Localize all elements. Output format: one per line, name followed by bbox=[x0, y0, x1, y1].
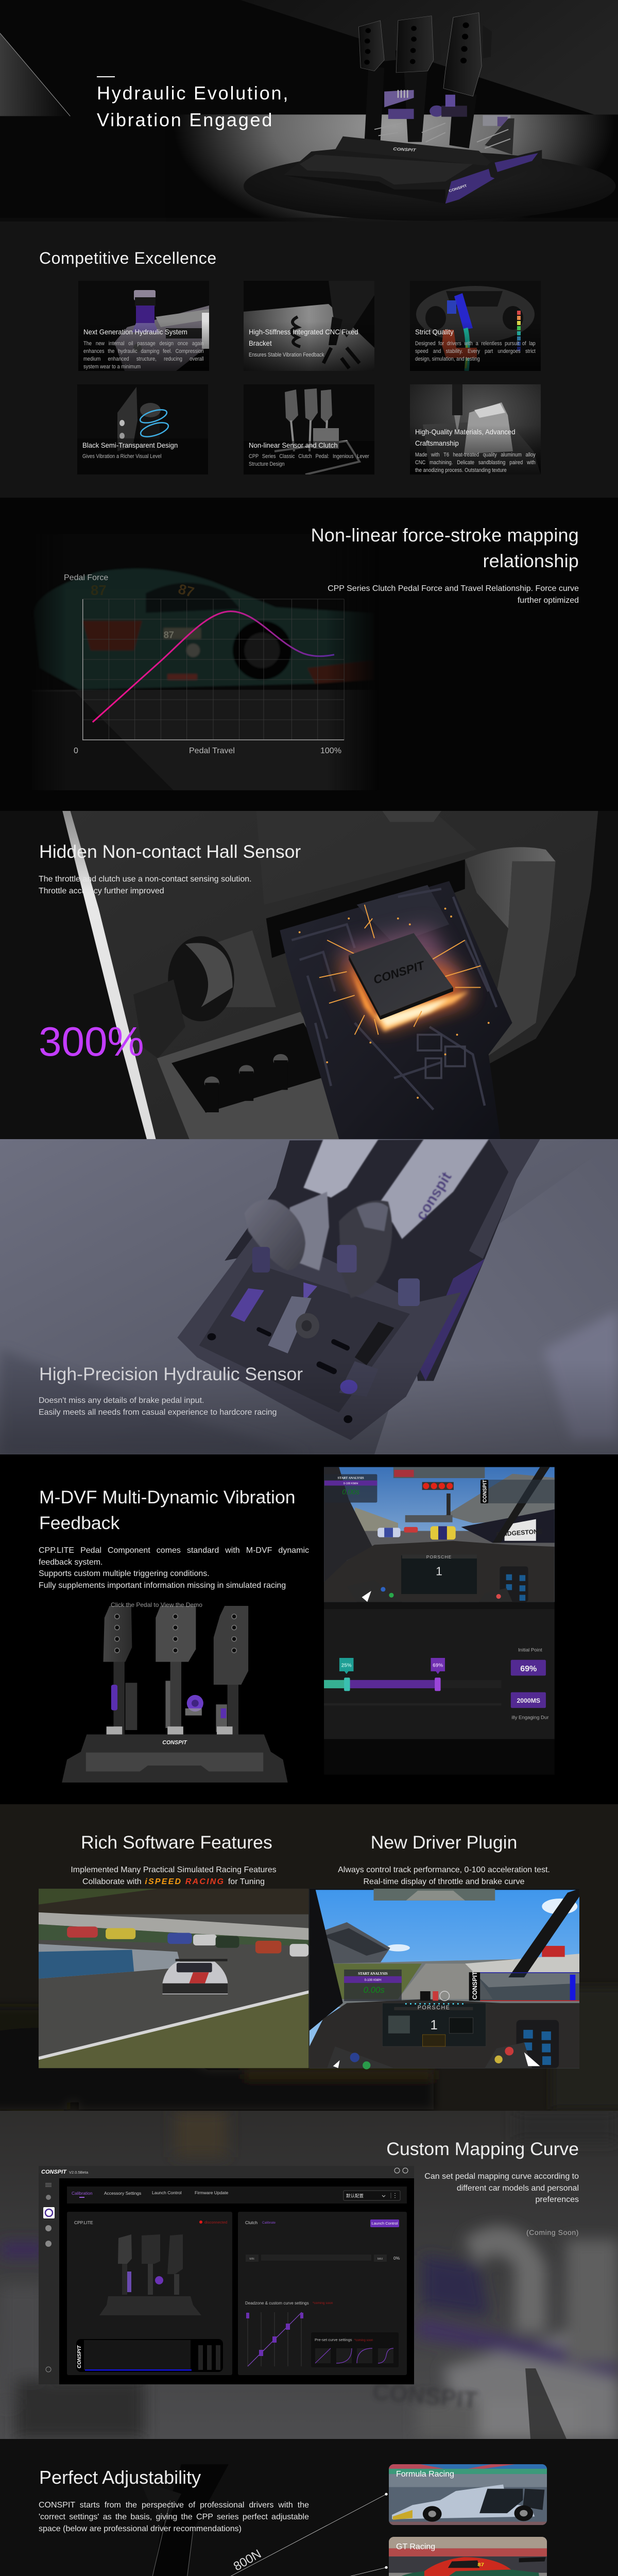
card text bbox=[415, 341, 536, 362]
axis label: zero: 0 bbox=[74, 747, 78, 755]
pedal plates bbox=[358, 13, 482, 96]
chip bbox=[349, 933, 453, 1020]
tab bar: Launch Control bbox=[152, 2190, 182, 2195]
coming soon note: (Coming Soon) bbox=[526, 2228, 579, 2236]
card title bbox=[249, 328, 358, 347]
heading: new driver plugin: New Driver Plugin bbox=[371, 1832, 517, 1853]
cockpit screenshot: 0-100 KM/H bbox=[365, 1978, 381, 1982]
photo: driver feet on pedals bbox=[0, 1139, 618, 1454]
track screenshot bbox=[39, 1889, 308, 2068]
pedal set: CONSPIT bbox=[162, 1740, 187, 1746]
simulator screen: START ANALYSIS bbox=[338, 1477, 364, 1480]
card: formula racing bbox=[389, 2464, 547, 2525]
curve settings panel: *coming soon bbox=[313, 2301, 333, 2305]
cockpit screenshot: 1 bbox=[430, 2017, 438, 2032]
card text bbox=[249, 453, 369, 467]
simulator screen: 0.00s bbox=[342, 1488, 359, 1496]
panel: software and driver plugin bbox=[0, 1804, 618, 2111]
text: Throttle accuracy further improved bbox=[39, 886, 164, 895]
card title bbox=[415, 428, 516, 447]
curve settings panel: Calibrate bbox=[262, 2221, 276, 2225]
card text: Ensures Stable Vibration Feedback bbox=[249, 352, 324, 358]
hydraulic cylinders bbox=[231, 1245, 420, 1397]
panel: custom mapping curve bbox=[0, 2111, 618, 2439]
heading: relationship bbox=[483, 550, 579, 571]
force curve bbox=[93, 612, 334, 722]
card title: Next Generation Hydraulic System bbox=[83, 328, 187, 336]
tab bar: Calibration bbox=[72, 2191, 93, 2196]
force lines bbox=[174, 2494, 386, 2576]
vibration settings panel: Initial Point bbox=[518, 1648, 542, 1653]
illustration: pedals and simulator demo bbox=[62, 1467, 555, 1783]
screenshots: race track and cockpit bbox=[0, 1889, 618, 2111]
simulator screen: 0-100 KM/H bbox=[344, 1482, 358, 1485]
heading: Perfect Adjustability bbox=[39, 2467, 201, 2488]
text: The throttle and clutch use a non-contact sensing solution. bbox=[39, 875, 252, 884]
vibration settings panel: 25% bbox=[341, 1663, 352, 1669]
text: different car models and personal bbox=[457, 2183, 579, 2193]
simulator screen: BRIDGESTONE bbox=[496, 1528, 543, 1538]
curve settings panel: MIN bbox=[249, 2258, 254, 2261]
panel: M-DVF vibration feedback bbox=[0, 1454, 618, 1804]
text: Easily meets all needs from casual experience to hardcore racing bbox=[39, 1408, 277, 1417]
text bbox=[328, 584, 579, 605]
card: non-linear sensor and clutch bbox=[244, 384, 374, 474]
heading: rich software features: Rich Software Features bbox=[81, 1832, 272, 1853]
curve settings panel: Deadzone & custom curve settings bbox=[245, 2301, 309, 2306]
curve settings panel: Pre-set curve settings bbox=[315, 2337, 352, 2342]
cockpit screenshot: START ANALYSIS bbox=[358, 1972, 388, 1976]
stat: 300%: 300% bbox=[39, 1019, 144, 1064]
heading: High-Precision Hydraulic Sensor bbox=[39, 1364, 303, 1384]
heading: Non-linear force-stroke mapping bbox=[311, 524, 579, 546]
text: driver plugin: Real-time display of throttle and brake curve bbox=[363, 1877, 525, 1886]
text bbox=[39, 1546, 309, 1590]
card text: CNC machining. Delicate sandblasting paired with bbox=[415, 460, 536, 466]
force-travel grid bbox=[83, 599, 344, 740]
rear pedal mechanisms bbox=[365, 25, 514, 155]
simulator screen: 1 bbox=[436, 1564, 442, 1578]
card: GT racing bbox=[389, 2537, 547, 2576]
text bbox=[424, 2172, 579, 2204]
axis label: 100%: 100% bbox=[320, 747, 341, 755]
tab bar: Accessory Settings bbox=[104, 2191, 141, 2196]
title bar: CONSPIT bbox=[41, 2169, 67, 2175]
text: software features bbox=[71, 1866, 277, 1886]
simulator screen bbox=[324, 1467, 555, 1602]
end points bbox=[166, 2493, 388, 2576]
sidebar icons bbox=[43, 2183, 55, 2372]
pedal calibration panel: disconnected bbox=[204, 2220, 227, 2225]
background: race car photo bbox=[36, 568, 369, 790]
pedal base: CONSPIT bbox=[448, 183, 468, 193]
chip glow bbox=[299, 905, 490, 1099]
card text: Structure Design bbox=[249, 461, 285, 467]
card title: Black Semi-Transparent Design bbox=[82, 441, 178, 449]
panel: competitive excellence bbox=[0, 222, 618, 498]
axis label: pedal force: Pedal Force bbox=[64, 573, 108, 582]
tab bar: 默认配置 bbox=[346, 2193, 364, 2199]
card: materials and craftsmanship bbox=[410, 384, 541, 474]
vibration settings panel: 69% bbox=[520, 1664, 537, 1673]
curve settings panel bbox=[238, 2212, 407, 2375]
card: CNC bracket bbox=[244, 281, 374, 371]
text: preferences bbox=[536, 2195, 579, 2204]
card text: the anodizing process. Outstanding texture bbox=[415, 467, 507, 473]
connector bbox=[157, 1012, 339, 1139]
title bar bbox=[41, 2168, 408, 2175]
pedal base: CONSPIT bbox=[393, 147, 417, 152]
card title: High-Stiffness Integrated CNC Fixed bbox=[249, 328, 358, 336]
text: software features: Collaborate with iSPEED RACING for Tuning bbox=[82, 1877, 265, 1886]
card: GT racing: 87 bbox=[477, 2562, 484, 2568]
card text: CPP Series Classic Clutch Pedal: Ingenious Lever bbox=[249, 453, 369, 460]
curve settings panel: MAX bbox=[377, 2258, 383, 2261]
circuit board bbox=[280, 881, 512, 1139]
background: race car photo: 87 bbox=[177, 581, 196, 600]
illustration: pedal arm with force lines bbox=[152, 2464, 388, 2576]
simulator screen: CONSPIT bbox=[482, 1480, 488, 1502]
card text: The new internal oil passage design once again bbox=[83, 341, 204, 347]
panel: hero bbox=[0, 0, 618, 222]
card title: Strict Quality bbox=[415, 328, 454, 336]
card text: medium enhanced structure, reducing overall bbox=[83, 356, 204, 362]
text bbox=[39, 1396, 277, 1417]
pedal calibration panel bbox=[67, 2212, 232, 2375]
card text bbox=[83, 341, 204, 370]
vibration settings panel: 69% bbox=[433, 1663, 443, 1669]
vibration settings panel bbox=[324, 1602, 555, 1775]
text: CONSPIT starts from the perspective of professional drivers with the 'correct settings' as the basis, giving the CPP series perfect adjustable space (below are professional driver recommendations) bbox=[39, 2501, 309, 2533]
axis label: pedal travel: Pedal Travel bbox=[189, 747, 235, 755]
software window bbox=[39, 2166, 414, 2384]
card text: system wear to a minimum bbox=[83, 364, 141, 370]
text: Supports custom multiple triggering conditions. bbox=[39, 1569, 210, 1578]
text: CPP Series Clutch Pedal Force and Travel Relationship. Force curve bbox=[328, 584, 579, 593]
panel: Hall sensor bbox=[0, 811, 618, 1139]
force label: 800N: 800N bbox=[231, 2547, 264, 2574]
text: Fully supplements important information missing in simulated racing bbox=[39, 1581, 286, 1590]
curve settings panel: *coming soon bbox=[354, 2339, 373, 2342]
vibration settings panel: illy Engaging Dur bbox=[511, 1715, 549, 1721]
demo hint: Click the Pedal to View the Demo bbox=[111, 1601, 202, 1608]
panel: non-linear force-stroke mapping bbox=[43, 528, 579, 790]
simulator screen: PORSCHE bbox=[426, 1554, 452, 1560]
heading bbox=[39, 1487, 296, 1533]
tab bar: Firmware Update bbox=[195, 2190, 228, 2195]
heading: Custom Mapping Curve bbox=[386, 2139, 579, 2159]
card text bbox=[415, 452, 536, 473]
card: hydraulic system bbox=[78, 281, 209, 371]
text: software features: Implemented Many Practical Simulated Racing Features bbox=[71, 1866, 277, 1874]
card title: Non-linear Sensor and Clutch bbox=[249, 441, 338, 449]
text bbox=[39, 875, 252, 895]
legs and shoes bbox=[244, 1139, 489, 1298]
card text: Gives Vibration a Richer Visual Level bbox=[82, 453, 161, 460]
heading: M-DVF Multi-Dynamic Vibration bbox=[39, 1487, 296, 1507]
illustration: sensor chip in housing bbox=[62, 811, 598, 1139]
curve settings panel: Clutch bbox=[245, 2220, 258, 2225]
cockpit screenshot: 0.00s bbox=[364, 1985, 385, 1995]
background: race car photo: 87 bbox=[164, 630, 174, 640]
cockpit screenshot bbox=[310, 1889, 579, 2069]
vibration settings panel: 2000MS bbox=[517, 1697, 540, 1704]
panel: perfect adjustability bbox=[0, 2439, 618, 2576]
background: blurred cockpit photo bbox=[0, 2111, 618, 2439]
card title: Craftsmanship bbox=[415, 439, 459, 447]
title bar: V2.0.5Beta bbox=[69, 2170, 89, 2175]
card text: design, simulation, and testing bbox=[415, 356, 480, 362]
title: Hydraulic Evolution, bbox=[97, 82, 289, 104]
text: further optimized bbox=[518, 596, 579, 605]
curve settings panel: 0% bbox=[393, 2256, 400, 2261]
text: CPP.LITE Pedal Component comes standard with M-DVF dynamic feedback system. bbox=[39, 1546, 309, 1566]
card text: Made with T6 heat-treated quality aluminum alloy bbox=[415, 452, 536, 458]
background: blurred cockpit photo: CONSPIT bbox=[371, 2378, 478, 2414]
card title: Bracket bbox=[249, 339, 272, 347]
card title: High-Quality Materials, Advanced bbox=[415, 428, 516, 436]
text: Can set pedal mapping curve according to bbox=[424, 2172, 579, 2181]
background: race car photo: 87 bbox=[91, 582, 107, 598]
heading: Feedback bbox=[39, 1513, 119, 1533]
card: GT racing: GT Racing bbox=[396, 2543, 435, 2551]
pedal calibration panel: CONSPIT bbox=[77, 2345, 82, 2368]
tab bar bbox=[67, 2187, 407, 2204]
text: driver plugin: Always control track performance, 0-100 acceleration test. bbox=[338, 1866, 550, 1874]
card: semi-transparent design bbox=[77, 384, 208, 474]
card text: enhances the hydraulic damping feel. Compression bbox=[83, 348, 204, 354]
card: formula racing: Formula Racing bbox=[396, 2470, 454, 2479]
hero illustration: pedal set on platform bbox=[0, 0, 618, 222]
text: Doesn't miss any details of brake pedal input. bbox=[39, 1396, 204, 1405]
pedal calibration panel: CPP.LITE bbox=[74, 2220, 93, 2225]
rig bbox=[177, 1139, 540, 1440]
pedal set bbox=[62, 1606, 288, 1783]
legs and shoes: conspit bbox=[413, 1169, 455, 1223]
cockpit screenshot: PORSCHE bbox=[418, 2005, 450, 2011]
heading bbox=[311, 524, 579, 571]
curve settings panel: Launch Control bbox=[372, 2221, 398, 2226]
heading: Competitive Excellence bbox=[39, 249, 217, 267]
chip: CONSPIT bbox=[372, 958, 427, 987]
text: driver plugin bbox=[338, 1866, 550, 1886]
title bbox=[97, 76, 289, 130]
panel: hydraulic sensor photo bbox=[0, 1139, 618, 1454]
chart axes bbox=[83, 599, 344, 740]
pedal base bbox=[284, 137, 542, 204]
heading: Hidden Non-contact Hall Sensor bbox=[39, 841, 301, 862]
card text: Designed for drivers with a relentless pursuit of lap bbox=[415, 341, 536, 347]
title: Vibration Engaged bbox=[97, 109, 273, 130]
card text: speed and stability. Every part undergoes strict bbox=[415, 348, 536, 354]
cockpit screenshot: CONSPIT bbox=[471, 1971, 478, 1999]
card: strict quality bbox=[410, 281, 541, 371]
